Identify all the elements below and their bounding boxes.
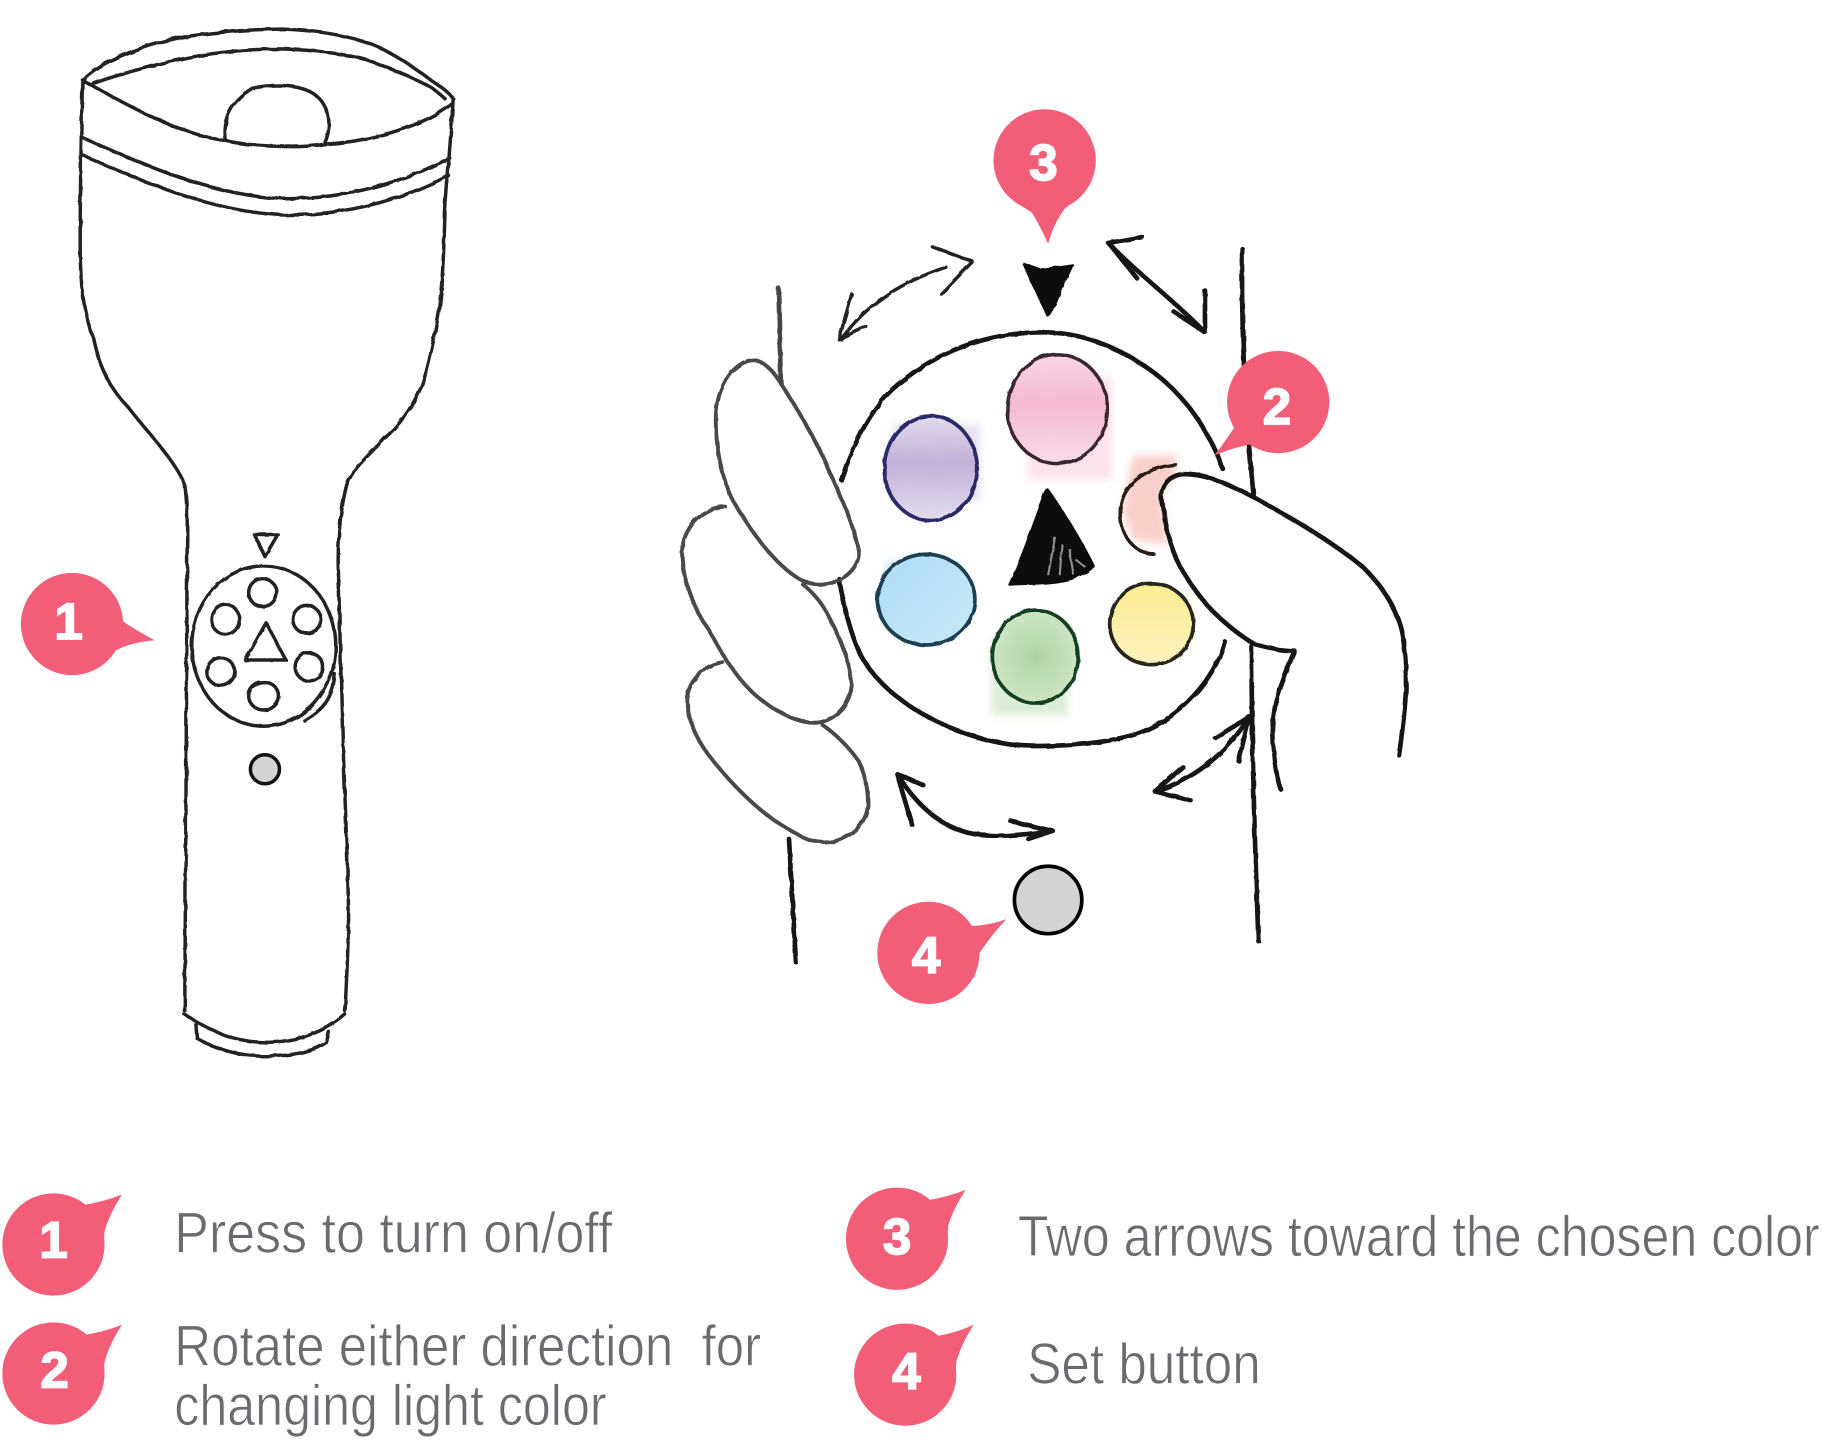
flashlight dial (192, 535, 336, 726)
legend marker 4: 4 (892, 1343, 921, 1400)
rotation arrow: bottom left (897, 774, 1053, 839)
illustration: flashlight-style light stick (80, 29, 453, 1056)
illustration: hand rotating the color dial (682, 237, 1406, 962)
marker 3 on top triangle (994, 109, 1096, 244)
flashlight body outline (80, 80, 453, 1056)
legend marker 2 (2, 1322, 122, 1425)
legend item 1 (2, 1193, 613, 1296)
legend marker 3 (846, 1188, 966, 1290)
swatch: blue (877, 554, 975, 645)
legend marker 3: 3 (883, 1208, 911, 1265)
swatch: green (992, 610, 1078, 703)
legend text 2 (174, 1314, 761, 1438)
legend text 1: Press to turn on/off (174, 1202, 613, 1266)
dial ring (839, 332, 1225, 746)
legend text 2: Rotate either direction for (174, 1314, 761, 1378)
legend text 2: changing light color (174, 1374, 607, 1438)
pressing finger (1161, 474, 1406, 789)
marker 4 on set button (877, 902, 1006, 1004)
top black triangle marker (1024, 264, 1073, 316)
flashlight head rim (81, 29, 453, 215)
legend item 2 (2, 1314, 761, 1438)
marker 2 on dial: 2 (1263, 378, 1291, 435)
stick body edges (779, 249, 1258, 962)
center triangle pointer (1010, 489, 1093, 585)
legend item 3 (846, 1188, 1820, 1290)
marker 4 on set button: 4 (912, 927, 941, 984)
marker 3 on top triangle: 3 (1029, 134, 1058, 191)
swatch: yellow (1110, 583, 1193, 665)
legend marker 4 (854, 1324, 974, 1426)
legend marker 1 (2, 1193, 122, 1296)
legend item 4 (854, 1324, 1261, 1426)
swatch: purple (884, 416, 977, 521)
marker 1 on flashlight: 1 (54, 593, 83, 650)
rotation arrow: top left (839, 246, 973, 339)
set button (1014, 866, 1082, 934)
swatch: red, partly under finger (1120, 465, 1176, 554)
swatch: pink (1007, 354, 1107, 464)
legend marker 1: 1 (39, 1211, 68, 1268)
color swatches (877, 354, 1193, 716)
rotation arrow: bottom right (1155, 717, 1249, 801)
flashlight set button (250, 755, 279, 784)
marker 1 on flashlight (21, 573, 155, 675)
legend text 4: Set button (1027, 1332, 1261, 1396)
fingers holding the stick (682, 360, 868, 842)
marker 2 on dial (1214, 351, 1329, 456)
legend marker 2: 2 (40, 1341, 69, 1398)
rotation arrow: top right (1109, 237, 1205, 332)
